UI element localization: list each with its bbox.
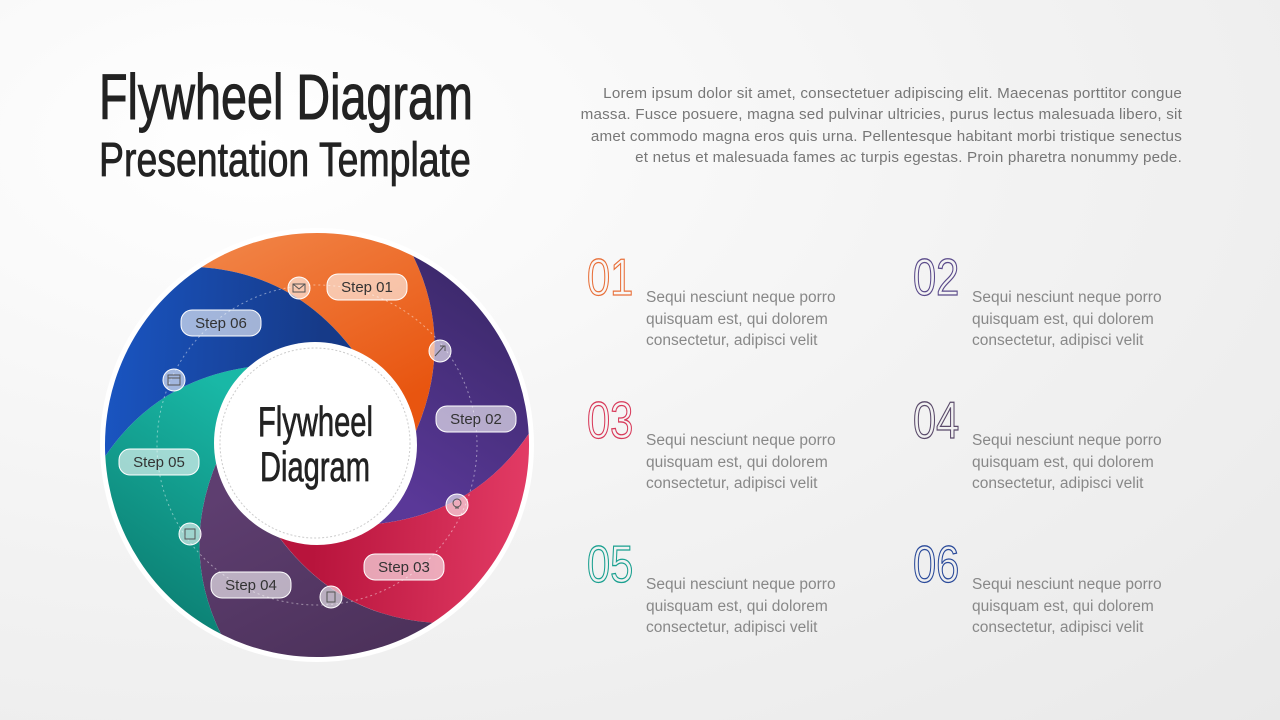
segment: step 02 (271, 239, 559, 540)
segment: step 06 (76, 237, 364, 538)
item 06: quisquam est, qui dolorem (972, 598, 1154, 614)
item 01: consectetur, adipisci velit (646, 332, 817, 349)
item 05: quisquam est, qui dolorem (646, 598, 828, 614)
item 06 (914, 545, 1162, 636)
title: Flywheel Diagram (99, 61, 473, 133)
item 01: Sequi nesciunt neque porro (646, 289, 836, 306)
item 04: Sequi nesciunt neque porro (972, 432, 1162, 449)
item 06: consectetur, adipisci velit (972, 619, 1143, 636)
icons (163, 277, 468, 608)
item 04 (914, 401, 1162, 492)
subtitle: Presentation Template (99, 134, 471, 187)
item 01: quisquam est, qui dolorem (646, 310, 828, 328)
item 01 (588, 258, 836, 349)
item 06: Sequi nesciunt neque porro (972, 576, 1162, 593)
item 05 (588, 545, 836, 636)
item 04: quisquam est, qui dolorem (972, 454, 1154, 470)
item 02: quisquam est, qui dolorem (972, 310, 1154, 328)
step labels: Step 05 (133, 454, 185, 471)
intro paragraph (581, 85, 1182, 166)
segment: step 01 (202, 233, 435, 431)
item 02: Sequi nesciunt neque porro (972, 289, 1162, 306)
step labels: Step 01 (341, 279, 393, 296)
item 02: consectetur, adipisci velit (972, 332, 1143, 349)
segment: step 05 (75, 350, 363, 651)
center circle (214, 342, 416, 544)
center circle: Flywheel (258, 398, 373, 445)
intro paragraph: massa. Fusce posuere, magna sed pulvinar ultricies, purus lectus malesuada libero, sit (581, 106, 1182, 123)
item 05: Sequi nesciunt neque porro (646, 576, 836, 593)
item 03: consectetur, adipisci velit (646, 475, 817, 492)
step labels (119, 274, 516, 598)
segment: step 04 (199, 459, 432, 657)
step labels: Step 06 (195, 315, 247, 332)
item 03 (588, 401, 836, 492)
segment: step 03 (270, 352, 558, 653)
item 05: consectetur, adipisci velit (646, 619, 817, 636)
step labels: Step 03 (378, 559, 430, 576)
intro paragraph: Lorem ipsum dolor sit amet, consectetuer adipiscing elit. Maecenas porttitor congue (603, 85, 1182, 102)
item 03: quisquam est, qui dolorem (646, 454, 828, 470)
item 04: consectetur, adipisci velit (972, 475, 1143, 492)
item 02 (914, 258, 1162, 349)
intro paragraph: et netus et malesuada fames ac turpis egestas. Proin pharetra nonummy pede. (635, 149, 1182, 166)
step labels: Step 02 (450, 411, 502, 428)
step labels: Step 04 (225, 577, 277, 594)
center circle: Diagram (260, 443, 370, 490)
intro paragraph: amet commodo magna eros quis urna. Pellentesque habitant morbi tristique senectus (591, 128, 1182, 145)
item 03: Sequi nesciunt neque porro (646, 432, 836, 449)
